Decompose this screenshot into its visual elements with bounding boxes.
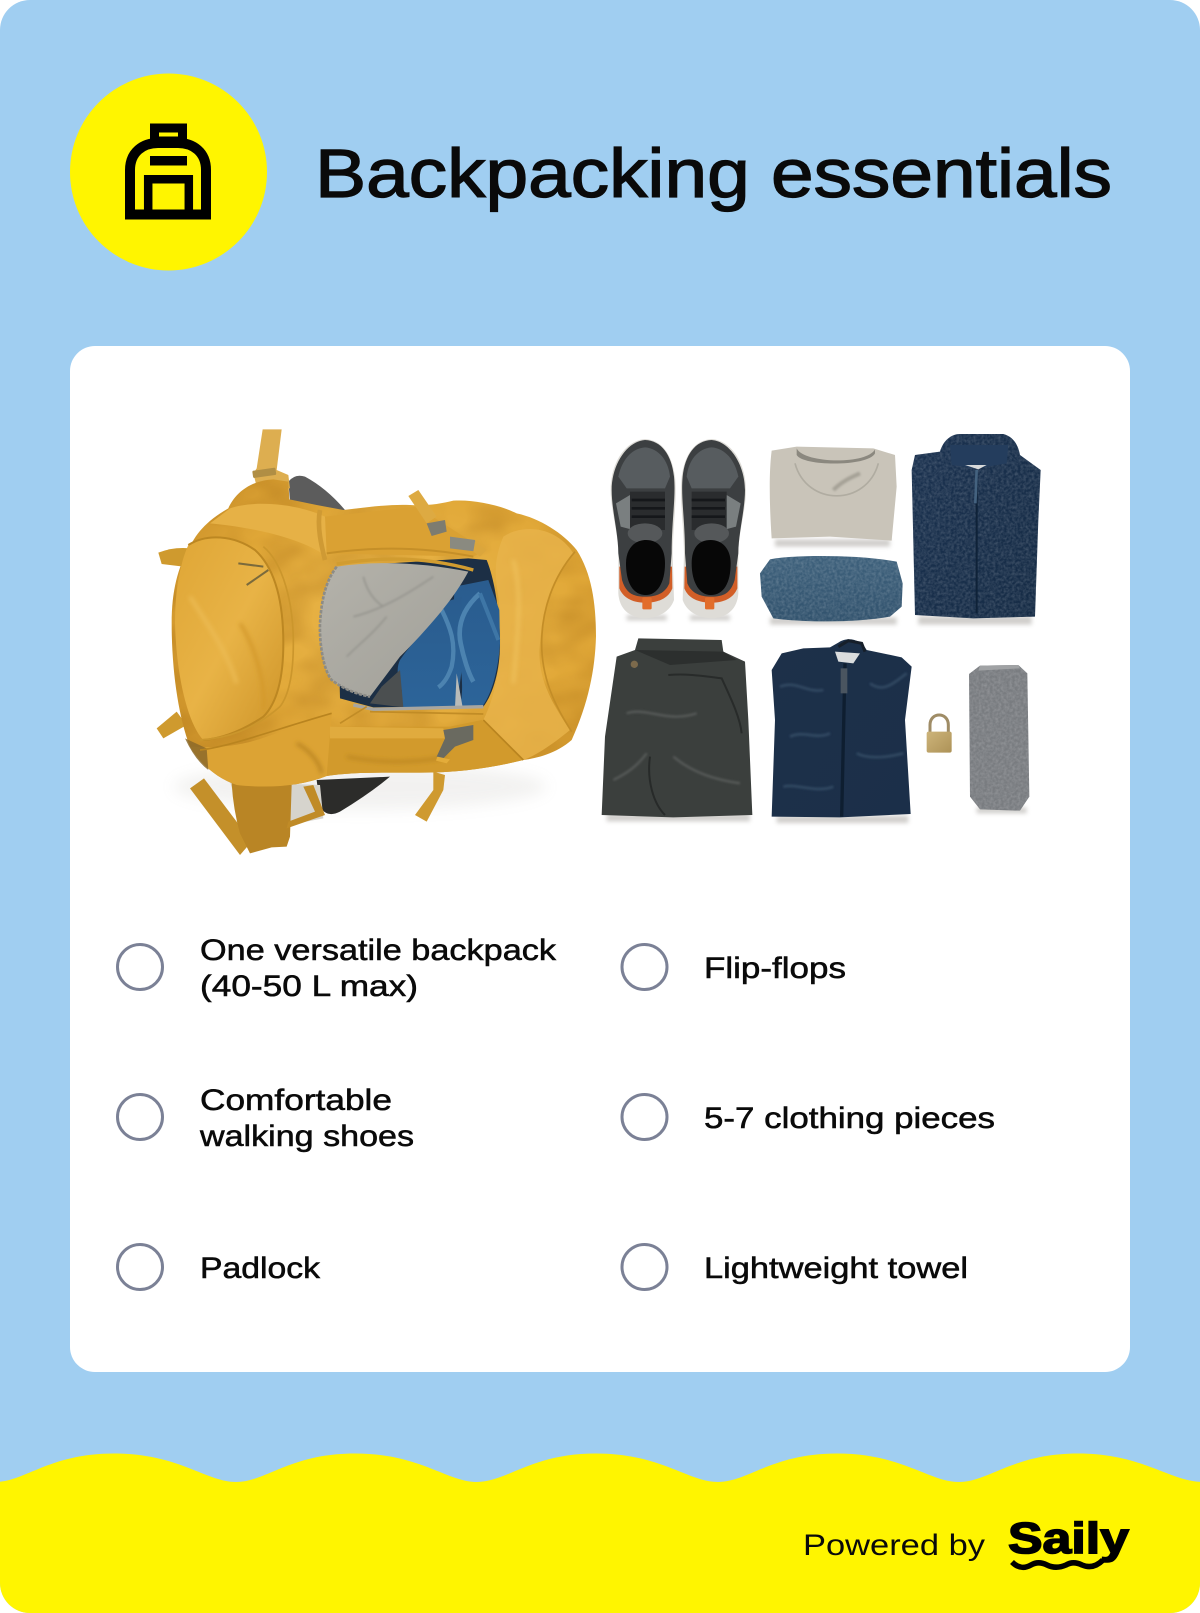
checklist item: walking shoes	[118, 1084, 414, 1153]
shoulder straps	[190, 778, 252, 855]
photo: open backpack	[157, 429, 596, 855]
back pad top	[288, 476, 345, 510]
ground shadow	[173, 763, 547, 810]
dark trousers	[602, 638, 752, 817]
rolled blue shirt	[760, 556, 903, 621]
flip-flops	[454, 580, 500, 707]
checklist item: clothing pieces: 5-7 clothing pieces	[704, 1102, 995, 1135]
grey flap	[320, 563, 468, 697]
front pocket	[175, 537, 283, 740]
footer credit: Powered by Saily	[803, 1514, 1130, 1567]
navy rain jacket	[772, 639, 912, 817]
title: Backpacking essentials	[315, 135, 1112, 212]
photo: packed gear	[602, 434, 1041, 823]
pack body	[172, 479, 596, 787]
zip trim	[337, 559, 473, 570]
checklist item: backpack: (40-50 L max)	[200, 970, 418, 1003]
checklist item: padlock: Padlock	[200, 1252, 321, 1285]
side tabs	[158, 548, 190, 567]
footer credit: Powered by Saily: Saily	[1008, 1514, 1130, 1563]
right lobe highlight	[483, 529, 573, 760]
opening interior	[337, 558, 500, 707]
wrinkles	[190, 560, 519, 773]
checklist item: walking shoes: walking shoes	[199, 1120, 414, 1153]
padlock	[927, 715, 952, 753]
top strap	[253, 429, 290, 488]
compression straps and buckles	[408, 490, 437, 523]
bottom light panel	[230, 782, 323, 827]
checklist item: backpack: One versatile backpack	[200, 934, 557, 967]
dark items under flap	[370, 670, 403, 707]
footer wave band	[0, 1454, 1200, 1613]
drawcords	[238, 563, 268, 585]
t-shirt	[770, 447, 897, 541]
upper band shadow	[325, 507, 485, 557]
navy fleece	[912, 434, 1041, 618]
garment shadows	[607, 539, 1032, 823]
checklist item: walking shoes: Comfortable	[200, 1084, 392, 1117]
checklist item: flip-flops	[622, 944, 846, 990]
checklist item: flip-flops: Flip-flops	[704, 952, 846, 985]
checklist item: lightweight towel: Lightweight towel	[704, 1252, 968, 1285]
panel: checklist card	[70, 346, 1130, 1372]
left shoe	[611, 439, 676, 618]
icon: backpack in yellow circle	[70, 74, 267, 270]
checklist item: backpack	[118, 934, 557, 1003]
right shoe	[681, 439, 746, 618]
checklist item: lightweight towel	[622, 1244, 968, 1290]
rolled grey towel	[969, 665, 1029, 811]
checklist item: padlock	[118, 1244, 321, 1290]
back pad bottom	[317, 777, 390, 814]
checklist item: clothing pieces	[622, 1094, 995, 1140]
footer credit: Powered by Saily: Powered by	[803, 1529, 985, 1562]
darker lower band	[325, 720, 523, 776]
